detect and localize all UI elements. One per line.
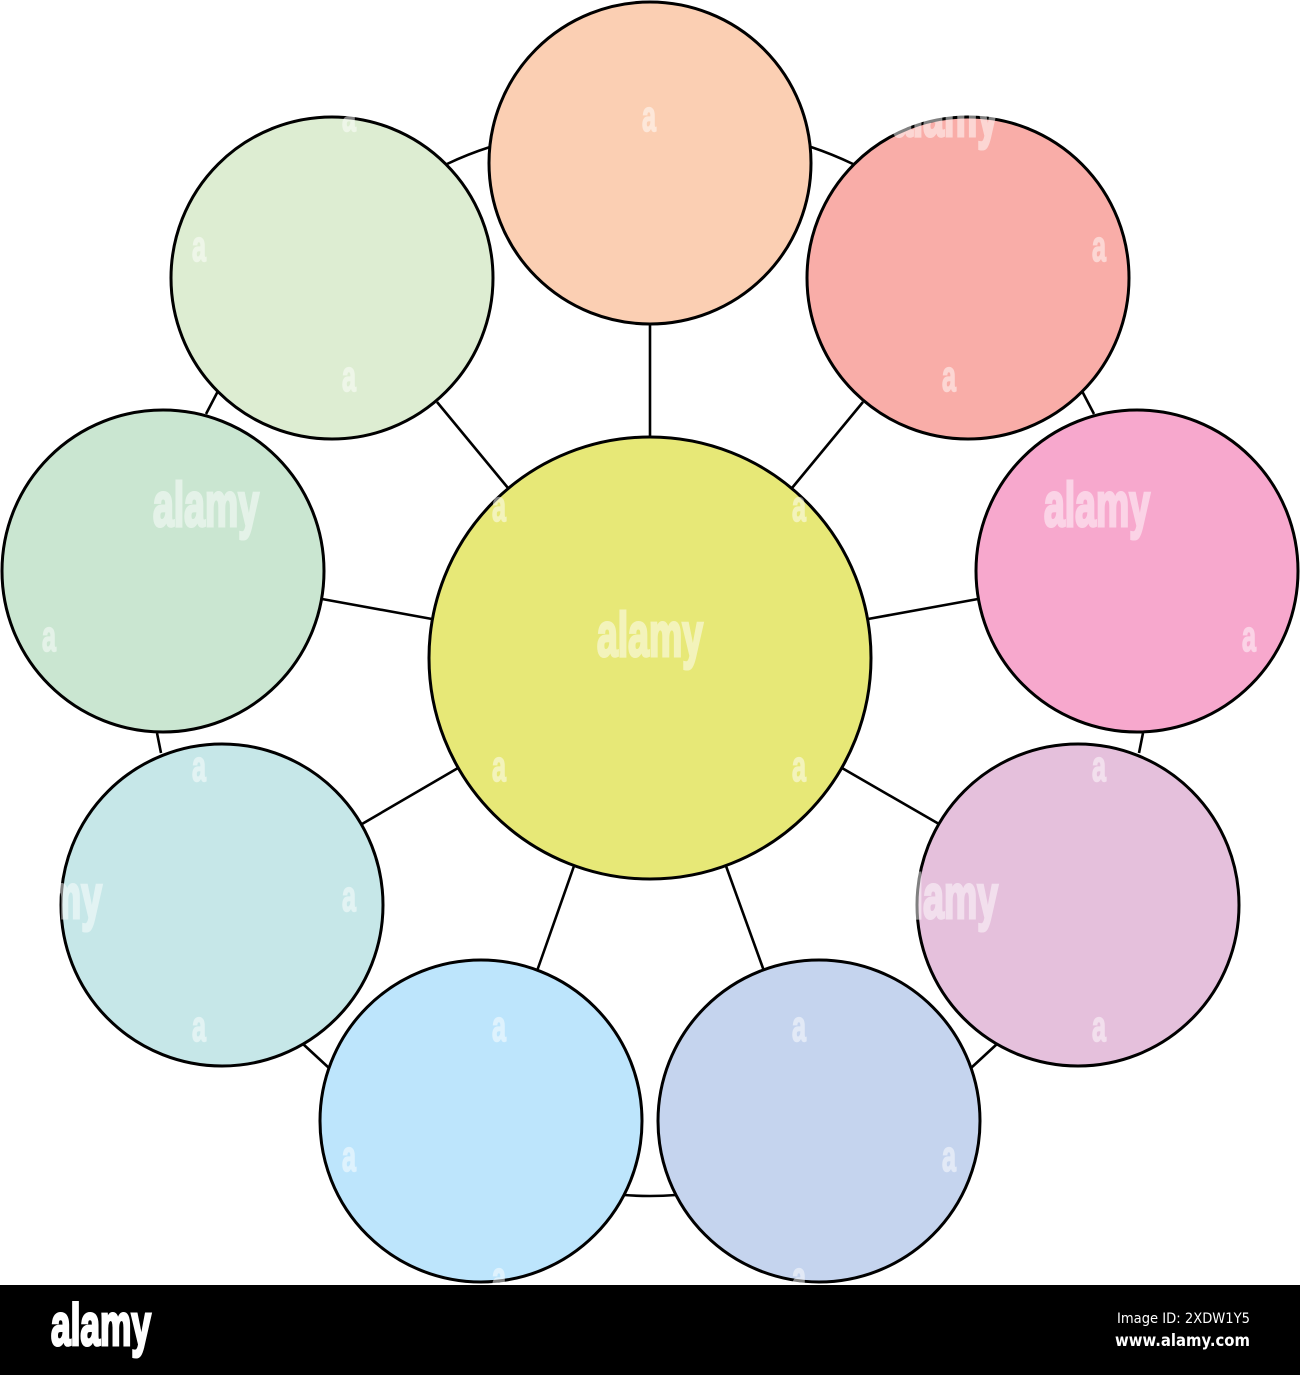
watermark overlay: a (492, 1002, 506, 1051)
watermark overlay: alamy (0, 863, 102, 932)
watermark overlay: alamy (892, 863, 998, 932)
circle: upper right salmon (807, 117, 1129, 439)
circle: right pink (976, 410, 1298, 732)
watermark overlay: a (1092, 1002, 1106, 1051)
watermark overlay: a (342, 872, 356, 921)
watermark overlay: alamy (1044, 471, 1150, 540)
spokes from centre hub to outer circles (322, 324, 978, 971)
watermark overlay: a (792, 1253, 806, 1302)
logo text: alamy (51, 1293, 151, 1358)
watermark overlay: a (1092, 742, 1106, 791)
bottom black credit bar (0, 1285, 1300, 1375)
circle: top peach (489, 2, 811, 324)
watermark overlay: a (792, 482, 806, 531)
watermark overlay: a (192, 222, 206, 271)
watermark overlay: alamy (892, 81, 998, 150)
watermark overlay: alamy (597, 601, 703, 670)
watermark overlay: a (42, 612, 56, 661)
watermark overlay: alamy (153, 471, 259, 540)
watermark overlay: a (492, 1253, 506, 1302)
circle: upper left light green (171, 117, 493, 439)
website text: www.alamy.com (1115, 1331, 1250, 1351)
circle: lower right mauve (917, 744, 1239, 1066)
watermark overlay: a (792, 742, 806, 791)
watermark overlay: a (192, 1002, 206, 1051)
circle: left pale green (2, 410, 324, 732)
circle: centre hub yellow (429, 437, 871, 879)
watermark overlay: a (342, 1132, 356, 1181)
watermark overlay: a (792, 1002, 806, 1051)
watermark overlay: a (1092, 222, 1106, 271)
image id text: Image ID: 2XDW1Y5 (1117, 1311, 1250, 1327)
watermark overlay: a (492, 482, 506, 531)
watermark overlay: a (1242, 612, 1256, 661)
watermark overlay: a (642, 92, 656, 141)
outer ring arcs linking neighbouring circles (157, 147, 1143, 1196)
watermark overlay: a (942, 1132, 956, 1181)
circle: bottom right periwinkle (658, 960, 980, 1282)
watermark overlay: a (492, 742, 506, 791)
watermark overlay: a (342, 92, 356, 141)
circle: bottom left sky blue (320, 960, 642, 1282)
watermark overlay: a (342, 352, 356, 401)
watermark overlay: a (192, 742, 206, 791)
watermark overlay: a (942, 352, 956, 401)
circle: lower left pale teal (61, 744, 383, 1066)
